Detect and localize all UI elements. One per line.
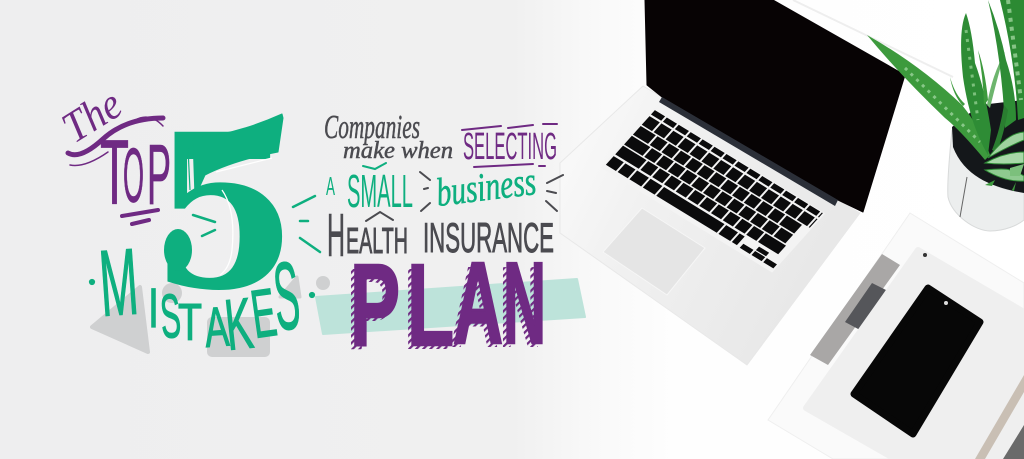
heading: Mistakes: S [158, 282, 183, 352]
text: A small: A [326, 171, 335, 201]
solid letters: N [503, 238, 546, 368]
laptop screen [645, 0, 905, 212]
text: PLAN [346, 238, 546, 374]
grey accent dashes [420, 172, 563, 211]
text: Selecting [462, 124, 557, 168]
photo: tablet, magazine and phone [768, 0, 1024, 459]
heading: Mistakes: E [247, 274, 281, 353]
The script: The [53, 79, 130, 152]
T swash bar [68, 118, 163, 155]
solid letters: A [453, 238, 503, 368]
text: Health Insurance [327, 202, 554, 269]
text: P [147, 128, 171, 223]
text: Health Insurance: INSURANCE [423, 214, 554, 261]
heading: Mistakes: S [270, 242, 304, 351]
big numeral 5: 5 [150, 88, 298, 338]
keyboard [601, 108, 825, 273]
text: Companies make when: make when [343, 138, 453, 164]
tablet [806, 250, 1024, 459]
text: Companies make when [324, 109, 453, 164]
solid letters: P [350, 240, 400, 370]
heading: Mistakes [90, 229, 314, 366]
text: A small [326, 163, 413, 217]
phone [854, 288, 980, 434]
text: Health Insurance: H [327, 202, 345, 269]
letter M: M [96, 229, 141, 336]
hatched shadow [346, 242, 542, 374]
solid letters: L [407, 240, 454, 370]
rays around 5 [193, 196, 320, 252]
text: SELECTING [463, 126, 557, 168]
text: SMALL [347, 165, 413, 217]
heading: Mistakes: K [221, 284, 257, 366]
heading: Mistakes: T [178, 294, 202, 352]
background grey shapes [92, 276, 330, 357]
text: Companies make when: Companies [324, 109, 420, 146]
underline strokes [122, 210, 158, 224]
heading: Mistakes: I [148, 276, 159, 339]
hatched shadow: N [499, 242, 542, 372]
Top letters: T [100, 122, 129, 224]
hatched shadow: A [449, 242, 499, 372]
heading: The Top [53, 79, 171, 224]
photo: potted plant [867, 0, 1024, 231]
Top letters: O [123, 133, 144, 219]
magazine edge [975, 375, 1024, 459]
photo: laptop [560, 0, 905, 365]
hatched shadow: L [403, 244, 450, 374]
text: business: business [434, 158, 538, 215]
photo strip [810, 254, 900, 365]
text: Health Insurance: EALTH [346, 220, 408, 261]
trackpad [603, 208, 705, 295]
hatched shadow: P [346, 244, 396, 374]
teal highlight bar [316, 279, 585, 334]
solid letters [350, 238, 546, 370]
heading: Mistakes: A [202, 294, 231, 359]
